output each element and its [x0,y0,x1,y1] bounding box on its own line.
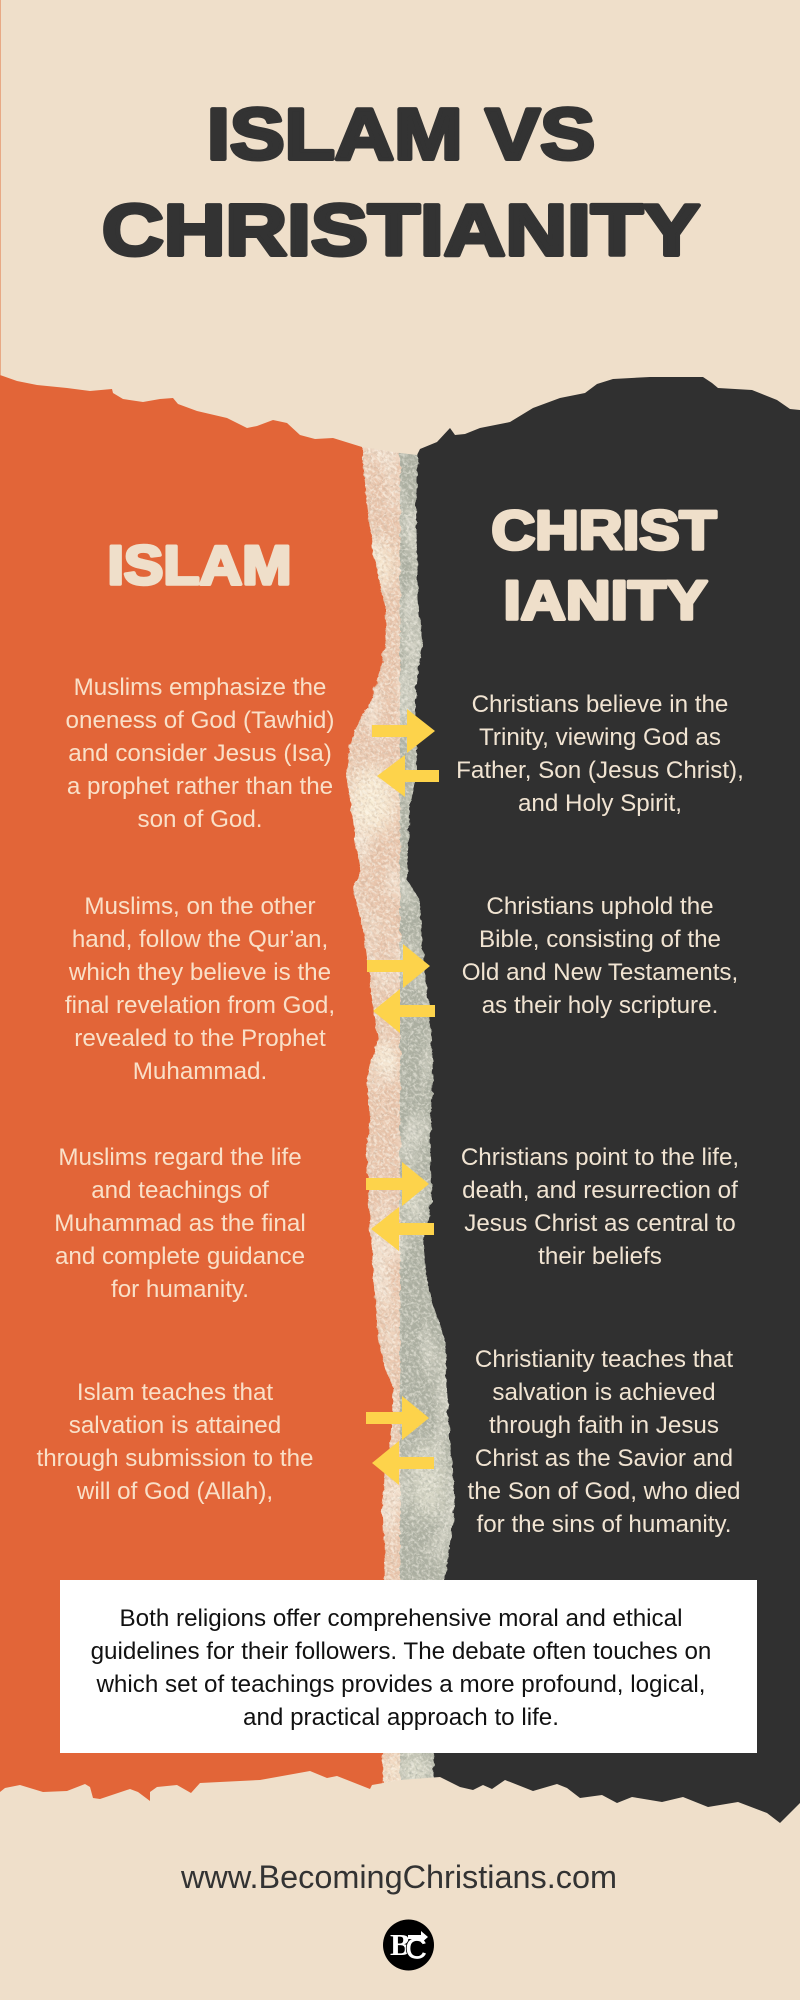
conclusion box: which set of teachings provides a more profound, logical, [95,1671,706,1698]
text: Islam on salvation: through submission to the [37,1445,313,1472]
logo: C [405,1931,427,1966]
text: Christianity on Jesus: their beliefs [538,1243,662,1270]
arrows: row 1 [372,709,439,797]
heading: Christianity [492,499,716,631]
heading: Christianity: IANITY [504,569,708,631]
title: CHRISTIANITY [102,191,700,271]
title [102,95,700,271]
text: Islam on salvation: salvation is attained [69,1412,281,1439]
panel: Islam column background [0,370,400,1840]
panel: Christianity column background [400,370,800,1840]
text: Islam on God: Muslims emphasize the [74,674,326,701]
text: Christianity on salvation: for the sins of humanity. [477,1511,731,1538]
text: Christianity on salvation: Christ as the Savior and [475,1445,733,1472]
text: Islam on salvation [37,1379,313,1505]
text: Christianity on God: and Holy Spirit, [518,790,682,817]
text: Islam on salvation: Islam teaches that [77,1379,273,1406]
conclusion box: Both religions offer comprehensive moral and ethical [120,1605,682,1632]
heading: Islam: ISLAM [108,534,292,596]
text: Islam on salvation: will of God (Allah), [76,1478,273,1505]
text: Islam on guidance: and complete guidance [55,1243,305,1270]
text: Islam on guidance [54,1144,306,1303]
text: Islam on scripture: Muhammad. [133,1058,267,1085]
arrows: row 3 [366,1162,434,1251]
text: Christianity on God: Father, Son (Jesus Christ), [456,757,744,784]
text: Islam on God [66,674,334,833]
arrows: row 4 [366,1396,434,1485]
text: Christianity on salvation: through faith in Jesus [489,1412,719,1439]
text: Christianity on God: Trinity, viewing God as [479,724,721,751]
torn paper strip divider [346,447,456,1784]
arrows: row 2 [367,944,435,1033]
text: Christianity on salvation: Christianity teaches that [475,1346,733,1373]
text: Christianity on scripture: Bible, consisting of the [479,926,721,953]
text: Islam on scripture: hand, follow the Qur’an, [72,926,328,953]
text: Islam on scripture: final revelation from God, [65,992,335,1019]
text: Christianity on God [456,691,744,817]
text: Islam on scripture [65,893,335,1085]
text: Christianity on Jesus: Jesus Christ as central to [464,1210,736,1237]
torn cream header edge [0,0,800,455]
text: Christianity on scripture: as their holy scripture. [482,992,718,1019]
text: Islam on scripture: which they believe is the [68,959,331,986]
conclusion box: and practical approach to life. [243,1704,559,1731]
conclusion box [60,1580,757,1753]
text: Islam on God: oneness of God (Tawhid) [66,707,334,734]
text: Christianity on Jesus: death, and resurrection of [462,1177,738,1204]
text: Islam on scripture: Muslims, on the other [84,893,316,920]
website footer: www.BecomingChristians.com [180,1859,617,1895]
heading: Christianity: CHRIST [492,499,716,561]
title: ISLAM VS [207,95,595,175]
torn cream footer edge [0,1771,800,2000]
conclusion box: guidelines for their followers. The debate often touches on [91,1638,711,1665]
logo: B [390,1927,411,1962]
text: Islam on scripture: revealed to the Prophet [74,1025,326,1052]
text: Christianity on scripture [462,893,738,1019]
text: Christianity on scripture: Christians uphold the [486,893,714,920]
text: Islam on guidance: Muslims regard the life [58,1144,302,1171]
text: Christianity on salvation: the Son of God, who died [468,1478,740,1505]
text: Christianity on scripture: Old and New Testaments, [462,959,738,986]
text: Christianity on Jesus: Christians point to the life, [461,1144,739,1171]
text: Islam on guidance: and teachings of [91,1177,269,1204]
thin left edge line [0,0,1,375]
logo [383,1920,434,1970]
text: Islam on God: and consider Jesus (Isa) [68,740,332,767]
text: Islam on guidance: for humanity. [111,1276,249,1303]
text: Christianity on God: Christians believe in the [472,691,728,718]
text: Christianity on salvation: salvation is achieved [492,1379,716,1406]
text: Islam on God: son of God. [137,806,263,833]
text: Islam on guidance: Muhammad as the final [54,1210,306,1237]
text: Christianity on salvation [468,1346,740,1538]
text: Christianity on Jesus [461,1144,739,1270]
text: Islam on God: a prophet rather than the [67,773,333,800]
